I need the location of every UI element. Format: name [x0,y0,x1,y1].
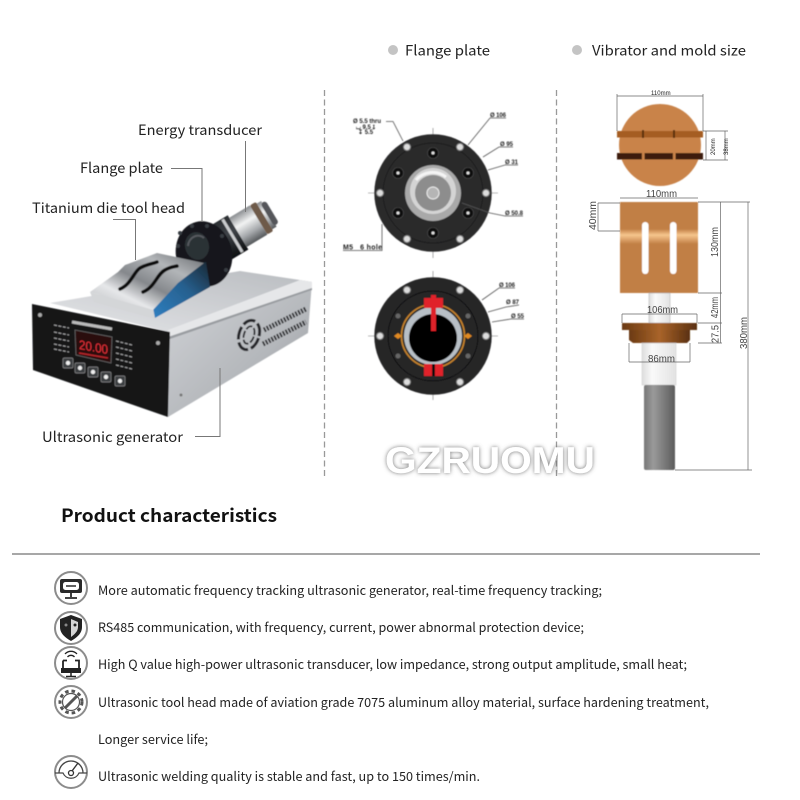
dimension labels [588,91,750,365]
dimension labels: 42mm [710,297,721,318]
feature 2: RS485 communication, with frequency, current, power abnormal protection device; [98,617,584,636]
flange front view drawing: M5 6 hole [343,244,382,252]
legend: flange plate: Flange plate [405,40,490,60]
generator housing [32,271,312,417]
feature 5: Ultrasonic welding quality is stable and fast, up to 150 times/min. [98,766,480,785]
feature 1: More automatic frequency tracking ultrasonic generator, real-time frequency tracking; [98,580,602,599]
icon: gear and wrench [55,686,87,718]
feature 3: High Q value high-power ultrasonic transducer, low impedance, strong output amplitude, small heat; [98,654,687,673]
dimension labels: 20mm [711,138,717,155]
dimension labels: 27.5 [710,325,722,343]
shaft [649,293,670,323]
dimension labels: 380mm [739,317,750,349]
icon: wireless monitor [55,647,87,679]
callout: flange plate [80,158,202,222]
gray cylinder [644,385,675,470]
flange front view drawing: Ø 50.8 [505,211,524,217]
callout: ultrasonic generator: Ultrasonic generator [42,427,184,447]
flange front view drawing: Ø 31 [505,160,519,166]
vibrator side view [620,202,698,470]
flange back view drawing: Ø 87 [506,300,520,306]
icon: shield [55,612,87,644]
dimension labels: 110mm [646,189,677,200]
feature 4 [55,686,709,748]
callout: titanium die tool head [32,198,185,260]
display: 20.00 [79,337,108,357]
callout: titanium die tool head: Titanium die tool head [32,198,185,218]
legend: vibrator and mold size: Vibrator and mold size [592,40,746,60]
brown flange [622,323,697,343]
dimensions [343,118,523,250]
flange back view drawing: Ø 106 [499,283,516,289]
feature 5 [55,756,480,788]
dimension lines [598,94,752,470]
callout: ultrasonic generator [42,368,220,447]
dimension labels: 38mm [724,138,730,155]
flange front view drawing [343,113,524,258]
flange front view drawing: Ø 106 [490,113,507,119]
tool head [90,253,210,319]
flange front view drawing: Ø 95 [500,142,514,148]
dimension labels: 110mm [651,91,671,97]
feature 3 [55,647,687,679]
feature 1 [55,572,602,604]
dimension labels: 130mm [710,227,721,257]
icon: monitor with sync [55,572,87,604]
callout: energy transducer: Energy transducer [138,120,263,140]
flange back view drawing: Ø 55 [511,314,525,320]
dimension labels: 106mm [647,305,678,316]
feature 2 [55,612,584,644]
flange [169,215,239,293]
callout: flange plate: Flange plate [80,158,163,178]
flange front view drawing: ↧ 5.5 [358,129,374,136]
product photo: ultrasonic welding machine [32,195,312,417]
dimension labels: 86mm [648,354,675,365]
vent [235,318,263,352]
watermark: GZRUOMU [385,440,595,481]
callout: energy transducer [138,120,263,212]
icon: speed gauge [55,756,87,788]
section title: Product characteristics [61,502,277,528]
flange front view drawing: ⌴ 9.5 ↧ [356,124,375,131]
dimension labels: 40mm [588,201,599,230]
flange back view drawing [368,271,525,400]
feature 4: Longer service life; [98,729,208,748]
panel buttons [63,358,125,386]
vibrator top view disc [617,104,703,186]
transducer [205,195,283,263]
display [75,330,112,363]
white cylinder [642,343,676,385]
flange front view drawing: Ø 5.5 thru [353,119,381,125]
horn block [620,202,698,293]
feature 4: Ultrasonic tool head made of aviation grade 7075 aluminum alloy material, surface hardening treatment, [98,692,709,711]
